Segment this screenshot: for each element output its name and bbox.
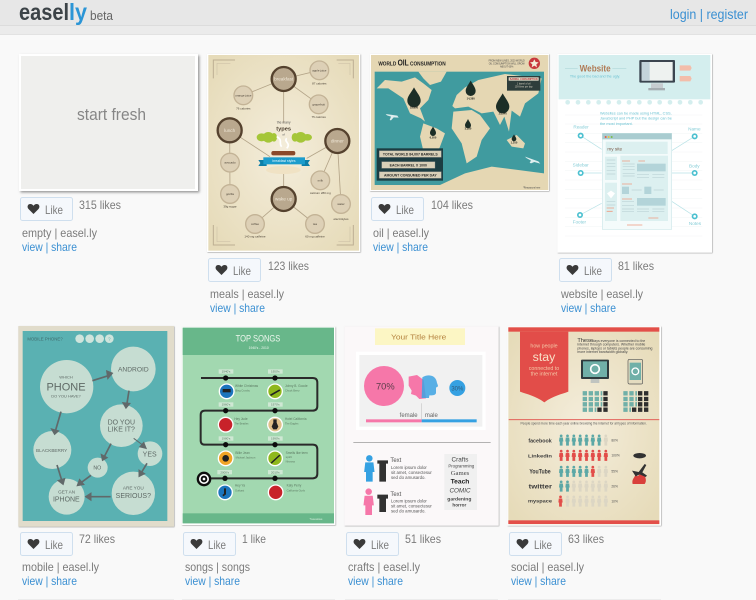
thumbnail: meals infographic: 76 calories	[236, 106, 251, 110]
thumbnail: website infographic: the most important.	[600, 122, 633, 126]
like count: 104 likes	[431, 198, 473, 212]
thumbnail: crafts template: sit amet, consectesur	[391, 470, 432, 475]
thumbnail: how people stay connected: phones, laptops or tablets people are consuming	[577, 346, 653, 350]
like button	[372, 198, 424, 220]
card: meals	[207, 54, 360, 315]
like button	[560, 258, 612, 282]
caption: social | easel.ly	[511, 560, 584, 574]
thumbnail: world oil consumption map: AMOUNT CONSUMED PER DAY	[384, 173, 437, 177]
view and share links: view | share	[373, 240, 428, 254]
card: crafts	[344, 326, 499, 588]
view and share links: view | share	[561, 301, 616, 315]
thumbnail: mobile phone flowchart: ANDROID	[118, 367, 149, 374]
thumbnail: how people stay connected: twitter	[529, 484, 553, 490]
thumbnail: website infographic: Name	[688, 127, 701, 132]
like count: 63 likes	[568, 532, 604, 546]
view and share links: view | share	[22, 240, 77, 254]
thumbnail: top songs timeline: The Beatles	[234, 422, 249, 426]
like button: Like	[208, 538, 226, 552]
thumbnail: website infographic: The good the bad and the ugly.	[570, 75, 620, 79]
thumbnail: mobile phone flowchart: MOBILE PHONE?	[27, 336, 63, 341]
thumbnail: mobile phone flowchart	[18, 326, 174, 527]
card: website	[557, 54, 712, 315]
thumbnail: top songs timeline: Johny B. Goode	[285, 384, 308, 388]
thumbnail: how people stay connected: days everyone is connected to the	[592, 339, 645, 343]
thumbnail: top songs timeline: 1940's	[222, 370, 231, 374]
thumbnail: world oil consumption map: 6,050	[430, 136, 437, 140]
thumbnail: top songs timeline: spirit	[286, 455, 292, 459]
thumbnail: crafts template: 30%	[451, 387, 464, 393]
like count: 81 likes	[618, 259, 654, 273]
thumbnail: mobile phone flowchart: GET AN	[58, 490, 75, 495]
thumbnail: how people stay connected: connected to	[529, 366, 559, 372]
thumbnail: mobile phone flowchart: LIKE IT?	[108, 427, 135, 434]
thumbnail: world oil consumption map: ABOUT 60%	[500, 65, 513, 68]
caption: songs | songs	[185, 560, 250, 574]
thumbnail: top songs timeline: 1980's	[222, 437, 231, 441]
thumbnail: top songs timeline: 1990's	[271, 437, 280, 441]
thumbnail: how people stay connected: 80%	[611, 438, 618, 442]
thumbnail: crafts template: Programming	[448, 464, 475, 469]
card: start fresh	[19, 54, 198, 254]
like count: 72 likes	[79, 532, 115, 546]
thumbnail: how people stay connected: 26%	[611, 484, 618, 488]
thumbnail: website infographic: Sidebar	[573, 163, 589, 168]
logo: beta	[90, 9, 113, 23]
thumbnail: meals infographic: water	[337, 202, 345, 206]
thumbnail: website infographic: my site	[607, 146, 622, 151]
thumbnail: crafts template: 70%	[376, 381, 395, 391]
thumbnail: meals infographic: grapefruit	[312, 102, 325, 106]
like button: Like	[396, 203, 414, 217]
thumbnail: top songs timeline: 1940's - 2010	[249, 346, 269, 350]
thumbnail: world oil consumption map: TOTAL WORLD 84,007 BARRELS	[383, 152, 438, 156]
thumbnail: how people stay connected: YouTube	[529, 470, 551, 476]
thumbnail: mobile phone flowchart: PHONE	[46, 382, 86, 394]
view and share links: view | share	[210, 301, 265, 315]
thumbnail: how people stay connected: myspace	[528, 498, 552, 504]
thumbnail: top songs timeline: Michael Jackson	[236, 456, 256, 460]
thumbnail: world oil consumption map: 25,340	[499, 112, 507, 116]
thumbnail: world oil consumption map: BARREL CONSUMPTION	[510, 78, 538, 81]
thumbnail: world oil consumption map: *Resources here	[523, 187, 541, 190]
thumbnail: top songs timeline: Chuck Berry	[285, 389, 300, 393]
thumbnail: top songs timeline: 2010's	[271, 470, 280, 474]
thumbnail: mobile phone flowchart: ARE YOU	[123, 486, 144, 491]
caption: oil | easel.ly	[373, 226, 429, 240]
thumbnail: crafts template: sed do amusardo.	[391, 509, 426, 514]
thumbnail: world oil consumption map: OIL CONSUMPTION WILL GROW	[489, 63, 525, 65]
thumbnail: top songs timeline: Smells like teen	[286, 451, 308, 455]
like count: 1 like	[242, 532, 266, 546]
caption: crafts | easel.ly	[348, 560, 420, 574]
thumbnail: crafts template: Lorem ipsum dolor	[391, 465, 427, 470]
thumbnail: world oil consumption map: 18,690	[410, 106, 419, 110]
thumbnail: top songs timeline: Bing Crosby	[235, 389, 250, 393]
thumbnail: empty	[19, 54, 198, 191]
thumbnail: world oil consumption map: 159 litres per day	[515, 86, 533, 89]
thumbnail: world oil consumption map: 1,100	[511, 140, 518, 144]
thumbnail: website infographic: Websites can be made using HTML, CSS,	[600, 111, 672, 115]
thumbnail: top songs timeline: 1970's	[271, 403, 280, 407]
thumbnail: top songs timeline: *resources	[310, 517, 323, 521]
thumbnail: website infographic: Body	[689, 164, 700, 169]
like count: 51 likes	[405, 532, 441, 546]
thumbnail: meals infographic: coffee	[251, 222, 259, 226]
thumbnail: mobile phone flowchart: BLACKBERRY	[36, 448, 67, 453]
caption: meals | easel.ly	[210, 287, 284, 301]
thumbnail: world oil consumption map	[370, 54, 549, 191]
thumbnail: how people stay connected: These	[577, 338, 593, 344]
thumbnail: mobile phone flowchart: ?	[108, 336, 111, 341]
login and register links: login | register	[670, 7, 748, 22]
thumbnail: meals infographic: electrolytes	[333, 217, 349, 221]
thumbnail: crafts template: gardening	[447, 496, 471, 502]
like button	[208, 258, 260, 282]
thumbnail: world oil consumption map: WORLD OIL CONSUMPTION	[378, 59, 446, 68]
thumbnail: world oil consumption map: EACH BARREL X 1000	[390, 163, 427, 167]
card: mobile	[18, 326, 174, 588]
thumbnail: meals infographic: 60 mg caffeine	[305, 235, 325, 239]
thumbnail: top songs timeline: 2000's	[220, 470, 230, 474]
like button	[346, 532, 398, 556]
thumbnail: how people stay connected: People spend more time each year online browsing the internet for all types of information.	[521, 421, 647, 425]
thumbnail: mobile phone flowchart: SERIOUS?	[116, 493, 151, 500]
thumbnail: top songs timeline: TOP SONGS	[236, 334, 280, 344]
thumbnail: how people stay connected: 100%	[611, 454, 620, 458]
thumbnail: how people stay connected: facebook	[528, 438, 552, 444]
thumbnail: meals infographic: orange juice	[235, 93, 252, 97]
like button: Like	[233, 264, 251, 278]
thumbnail: crafts template: Crafts	[452, 457, 468, 464]
like count: 123 likes	[268, 259, 309, 273]
view and share links: view | share	[511, 574, 566, 588]
card: oil	[370, 54, 549, 254]
thumbnail: how people stay connected: internet through computers. Whether mobile	[577, 343, 645, 347]
thumbnail: meals infographic: milk	[318, 178, 323, 182]
view and share links: view | share	[185, 574, 240, 588]
thumbnail: world oil consumption map: 3,330	[465, 127, 472, 131]
thumbnail: meals infographic: lunch	[224, 128, 236, 133]
thumbnail: top songs timeline: White Christmas	[235, 384, 259, 388]
thumbnail: world oil consumption map: FROM NEW LINES, 2020 WORLD	[489, 60, 525, 62]
thumbnail: mobile phone flowchart: NO	[93, 466, 101, 472]
thumbnail: how people stay connected: how people	[530, 343, 558, 349]
thumbnail: crafts template: Lorem ipsum dolor	[391, 499, 427, 504]
thumbnail: meals infographic: 39g sugar	[223, 204, 237, 208]
thumbnail: crafts template: Text	[390, 458, 402, 464]
like button: Like	[45, 203, 63, 217]
thumbnail: top songs timeline: Katy Perry	[287, 484, 302, 488]
caption: mobile | easel.ly	[22, 560, 99, 574]
view and share links: view | share	[348, 574, 403, 588]
thumbnail: crafts template: male	[425, 413, 438, 419]
thumbnail: top songs timeline: Billie Jean	[235, 451, 250, 455]
thumbnail: mobile phone flowchart: WHICH	[59, 375, 73, 380]
thumbnail: meals infographic: calcium 280 mg	[310, 191, 331, 195]
thumbnail: crafts template: sit amet, consectesur	[391, 504, 432, 509]
thumbnail: how people stay connected: the internet	[531, 372, 558, 378]
thumbnail: top songs timeline: Hotel California	[285, 417, 307, 421]
thumbnail: website infographic	[557, 54, 712, 253]
thumbnail: how people stay connected	[507, 326, 661, 526]
thumbnail: top songs timeline: 1950's	[271, 370, 280, 374]
thumbnail: top songs timeline	[182, 327, 335, 525]
thumbnail: website infographic: Footer	[573, 220, 587, 225]
thumbnail: crafts template	[344, 326, 499, 526]
thumbnail: meals infographic: avocado	[224, 161, 236, 165]
thumbnail: meals infographic: of	[282, 132, 285, 136]
caption: website | easel.ly	[560, 287, 643, 301]
thumbnail: meals infographic: wake up	[275, 197, 293, 202]
like button	[20, 532, 72, 556]
thumbnail: meals infographic: dinner	[331, 139, 344, 144]
like button: Like	[371, 538, 389, 552]
thumbnail: crafts template: Teach	[451, 479, 469, 486]
thumbnail: top songs timeline: Hey Jude	[234, 417, 248, 421]
page header bar	[0, 0, 756, 35]
thumbnail: top songs timeline: Outkast	[235, 488, 244, 492]
thumbnail: crafts template: horror	[452, 503, 467, 508]
like button	[510, 532, 562, 556]
view and share links: view | share	[22, 574, 77, 588]
caption: empty | easel.ly	[22, 226, 97, 240]
thumbnail: world oil consumption map: 14,380	[467, 96, 475, 100]
thumbnail: website infographic: Website	[580, 63, 611, 73]
thumbnail: top songs timeline: California Gurls	[287, 488, 306, 492]
thumbnail: meals infographic: 75 calories	[311, 115, 326, 119]
thumbnail: world oil consumption map: 1 barrel of oil	[517, 82, 531, 85]
thumbnail: how people stay connected: more internet bandwidth globally.	[577, 350, 628, 354]
thumbnail: crafts template: Games	[451, 470, 470, 477]
thumbnail: website infographic: Notes	[689, 221, 702, 226]
thumbnail: crafts template: sed do amusardo.	[391, 475, 426, 480]
thumbnail: top songs timeline: Nirvana	[286, 459, 295, 463]
start fresh label: start fresh	[77, 106, 146, 124]
like count: 315 likes	[79, 198, 121, 212]
card: social	[507, 326, 661, 588]
thumbnail: how people stay connected: 55%	[611, 470, 618, 474]
thumbnail: meals infographic: 140 mg caffeine	[244, 235, 266, 239]
thumbnail: mobile phone flowchart: IPHONE	[53, 496, 80, 503]
like button	[184, 532, 236, 556]
thumbnail: mobile phone flowchart: DO YOU HAVE?	[51, 394, 82, 399]
thumbnail: crafts template: female	[400, 413, 418, 419]
like button: Like	[534, 538, 552, 552]
like button: Like	[584, 264, 602, 278]
thumbnail: top songs timeline: 1960's	[222, 403, 231, 407]
thumbnail: website infographic: Reader	[573, 125, 589, 130]
thumbnail: crafts template: COMIC	[449, 488, 471, 495]
thumbnail: meals infographic: 87 calories	[312, 81, 327, 85]
card: songs	[182, 327, 335, 588]
thumbnail: meals infographic: gorilla	[226, 192, 234, 196]
logo	[19, 0, 113, 25]
thumbnail: mobile phone flowchart: DO YOU	[108, 419, 135, 426]
thumbnail: top songs timeline: The Eagles	[285, 422, 299, 426]
thumbnail: mobile phone flowchart: YES	[143, 451, 157, 458]
thumbnail: how people stay connected: LinkedIn	[528, 454, 552, 460]
thumbnail: meals infographic	[207, 54, 360, 252]
like button: Like	[45, 538, 63, 552]
thumbnail: how people stay connected: stay	[533, 350, 556, 364]
thumbnail: meals infographic: tea	[313, 222, 317, 226]
thumbnail: website infographic: JavaScript and PHP but the design can be	[600, 117, 672, 121]
thumbnail: meals infographic: types	[276, 126, 291, 132]
thumbnail: meals infographic: apple juice	[312, 68, 327, 72]
thumbnail: meals infographic: breakfast	[274, 77, 294, 82]
thumbnail: top songs timeline: Hey Ya	[235, 484, 245, 488]
thumbnail: meals infographic: the many	[277, 120, 291, 124]
thumbnail: crafts template: Text	[390, 492, 402, 498]
thumbnail: meals infographic: breakfast styles	[272, 159, 296, 163]
like button	[20, 198, 72, 220]
thumbnail: how people stay connected: 10%	[611, 499, 618, 503]
thumbnail: crafts template: Your Title Here	[391, 332, 446, 341]
